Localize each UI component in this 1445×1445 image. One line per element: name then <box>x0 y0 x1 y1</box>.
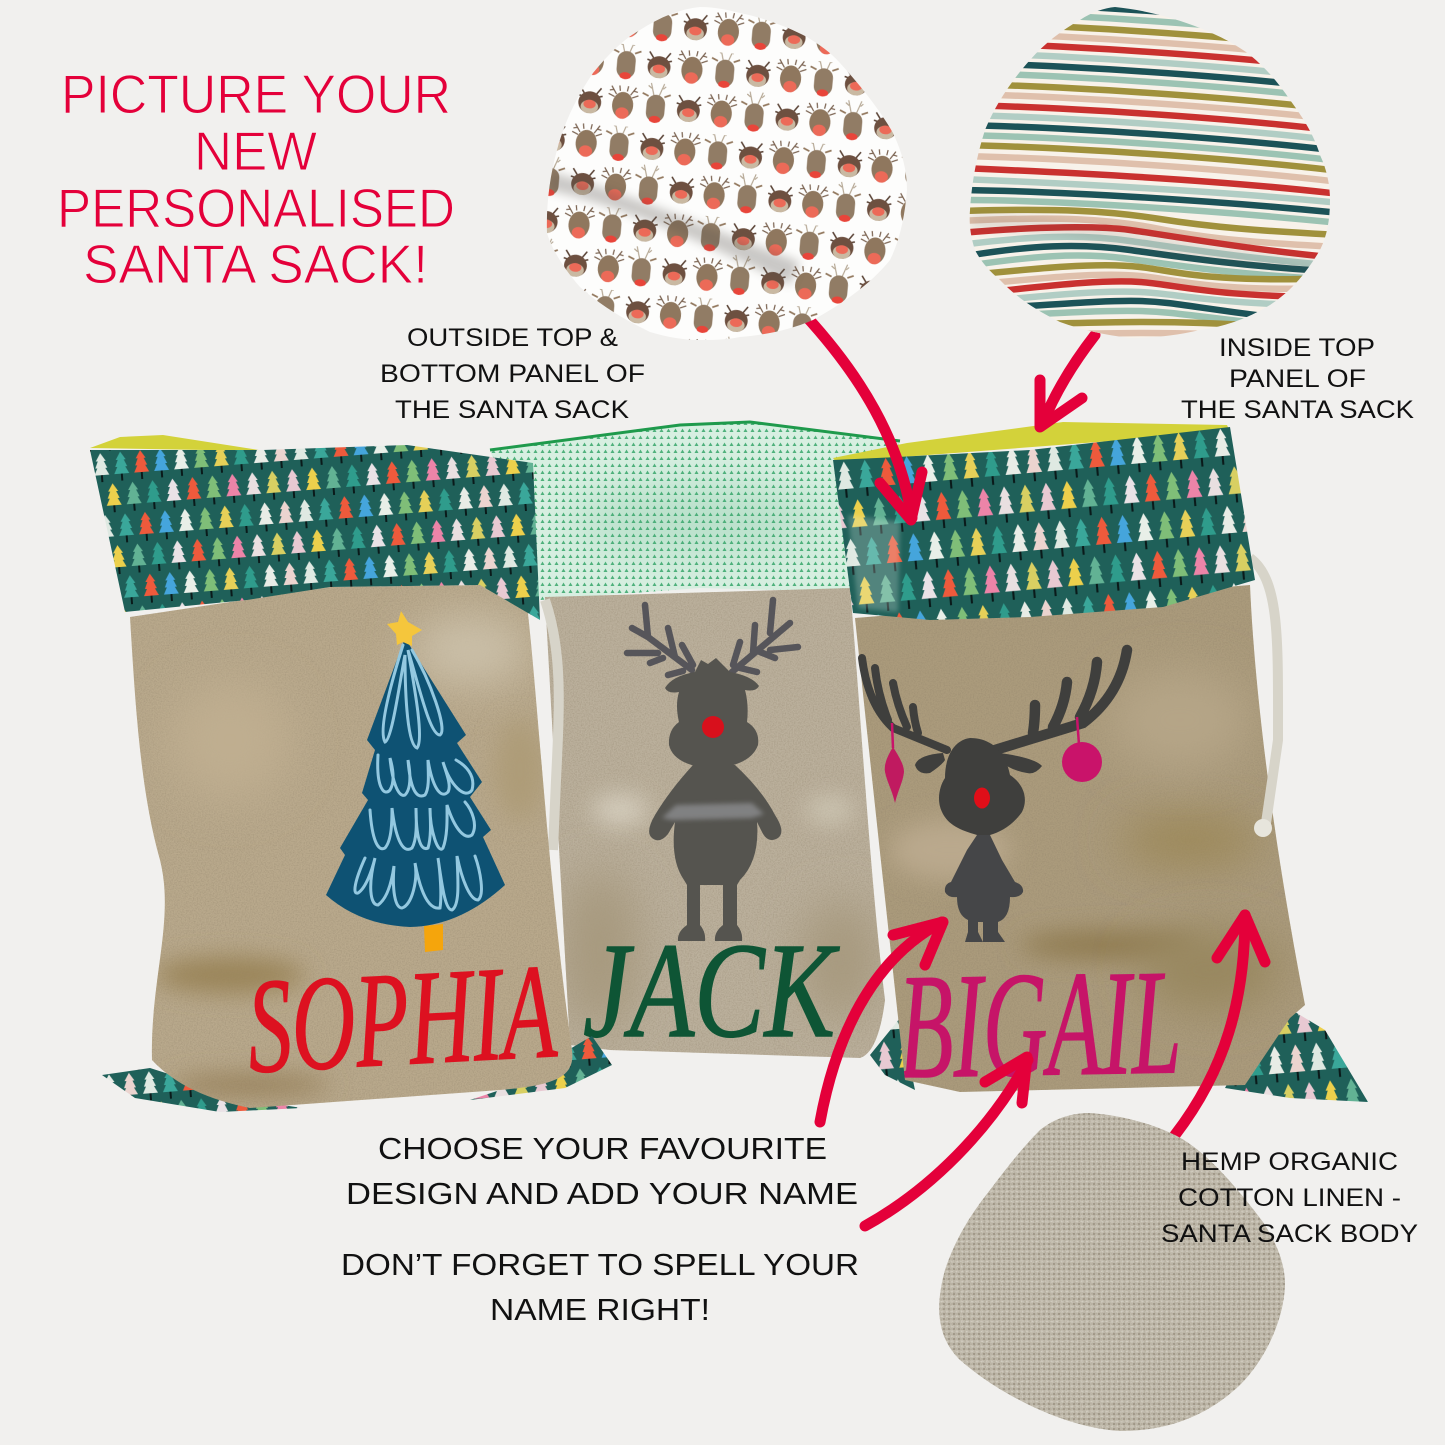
glare on body <box>662 803 764 820</box>
rear corner flap <box>470 1036 612 1100</box>
fabric texture and shading <box>125 580 585 1115</box>
label: hemp linen body: HEMP ORGANIC <box>1181 1148 1398 1176</box>
label: outside panel: BOTTOM PANEL OF <box>380 360 645 388</box>
label: spell name: DON’T FORGET TO SPELL YOUR <box>341 1247 859 1282</box>
name: Jack: JACK <box>583 916 840 1066</box>
name: Abigail: ABIGAIL <box>837 939 1183 1111</box>
body <box>945 835 1023 942</box>
right ear <box>1000 753 1042 773</box>
head <box>939 738 1025 835</box>
label: inside panel: PANEL OF <box>1229 365 1366 393</box>
tree star <box>387 611 422 646</box>
band fold shading <box>570 485 830 555</box>
swatch: hemp linen fabric <box>939 1113 1285 1431</box>
rear corner flap <box>1225 1012 1368 1102</box>
tree print band <box>90 445 540 620</box>
label: outside panel: OUTSIDE TOP & <box>407 324 618 352</box>
teardrop bauble <box>885 747 904 803</box>
label: outside panel <box>380 324 645 424</box>
swatch: reindeer fabric <box>540 0 910 345</box>
reindeer nose <box>702 716 724 738</box>
title: NEW <box>194 120 317 182</box>
icon: christmas tree <box>326 611 505 952</box>
label: spell name <box>341 1247 859 1327</box>
left antler <box>862 658 947 750</box>
compressed pleat streaks <box>848 515 900 612</box>
front corner flap <box>102 1068 302 1112</box>
label: choose design: CHOOSE YOUR FAVOURITE <box>378 1131 827 1166</box>
head <box>665 658 759 767</box>
label: outside panel: THE SANTA SACK <box>395 396 629 424</box>
label: choose design <box>346 1131 858 1211</box>
arrow: spell name <box>865 1057 1028 1226</box>
round bauble <box>1062 742 1102 782</box>
green top binding <box>490 422 900 450</box>
arrow: inside fabric to lining <box>1040 335 1095 427</box>
reindeer nose <box>974 788 990 808</box>
drawstring cord <box>545 600 559 850</box>
yellow lining <box>833 422 1230 462</box>
arrow: choose design <box>820 922 943 1122</box>
arrow: linen to sack body <box>1175 915 1265 1135</box>
linen speckle texture <box>939 1113 1285 1431</box>
sack: Abigail (right) <box>833 422 1368 1111</box>
tree print band <box>833 427 1255 620</box>
body <box>649 765 781 941</box>
label: inside panel: INSIDE TOP <box>1219 334 1375 362</box>
label: hemp linen body: SANTA SACK BODY <box>1161 1220 1418 1248</box>
sack: Jack (middle) <box>490 422 900 1066</box>
mint fabric band <box>490 422 900 600</box>
cord knot <box>1254 819 1272 837</box>
label: inside panel: THE SANTA SACK <box>1181 396 1414 424</box>
fabric fold shadow <box>548 172 800 285</box>
title: PERSONALISED <box>57 177 455 239</box>
tree foliage <box>326 638 505 927</box>
label: spell name: NAME RIGHT! <box>490 1292 710 1327</box>
left rear flap <box>870 1018 915 1090</box>
yellow lining <box>90 435 265 451</box>
title: PICTURE YOUR <box>61 63 451 125</box>
label: hemp linen body: COTTON LINEN - <box>1178 1184 1401 1212</box>
bauble strings <box>892 717 1079 748</box>
label: inside panel <box>1181 334 1414 424</box>
fold shadow <box>970 215 1320 272</box>
stripes <box>960 2 1340 340</box>
left ear <box>915 753 945 773</box>
fabric texture and shading <box>850 580 1310 1100</box>
tree trunk <box>424 924 443 952</box>
linen body <box>855 585 1305 1092</box>
sack: Sophia (left) <box>90 435 612 1115</box>
label: choose design: DESIGN AND ADD YOUR NAME <box>346 1176 858 1211</box>
antlers <box>627 600 798 675</box>
swatch: striped lining fabric <box>960 0 1340 345</box>
right antler <box>995 650 1127 750</box>
tree scribble lines <box>355 645 481 910</box>
icon: reindeer with baubles <box>862 650 1127 942</box>
drawstring cord <box>1250 558 1278 830</box>
title: SANTA SACK! <box>83 233 428 295</box>
title <box>57 63 455 295</box>
fabric texture <box>540 585 890 1065</box>
name: Sophia: SOPHIA <box>244 937 559 1102</box>
label: hemp linen body <box>1161 1148 1418 1248</box>
arrow: outside fabric to sack top <box>805 315 922 520</box>
linen body <box>130 585 572 1108</box>
icon: reindeer silhouette <box>627 600 798 941</box>
linen body <box>545 588 885 1058</box>
